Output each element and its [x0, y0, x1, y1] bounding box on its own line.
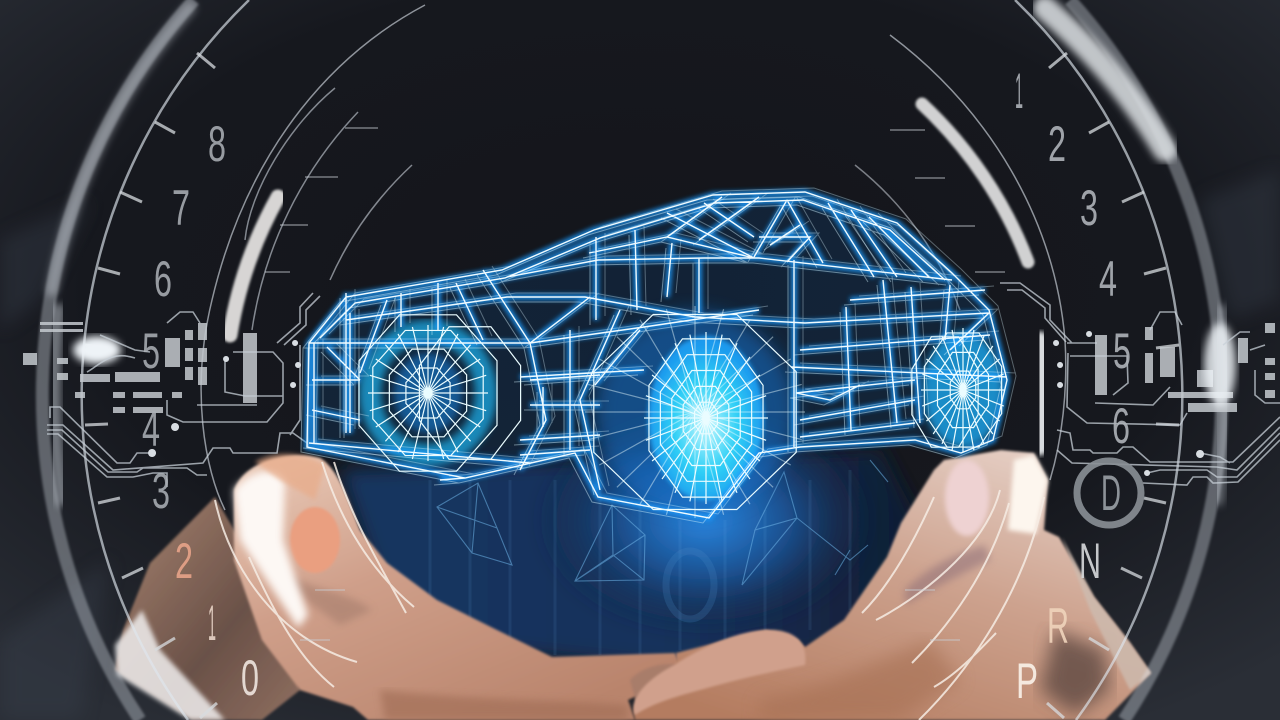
- secondary wire mesh layers: [301, 197, 1001, 523]
- right circuit blocks: [1095, 323, 1275, 412]
- left gauge numerals: 0: [241, 650, 259, 706]
- left hand: [115, 454, 684, 720]
- wheel glows: [370, 312, 1003, 512]
- right gauge numerals and gear letters: 2: [1048, 116, 1066, 172]
- low-poly network under car: [437, 460, 888, 619]
- left gauge numerals: 2: [175, 533, 193, 589]
- left thumbnail: [290, 507, 340, 573]
- left gauge numerals: 1: [208, 595, 216, 651]
- right gauge numerals and gear letters: D: [1101, 465, 1121, 521]
- left gauge numerals: [142, 116, 259, 706]
- right gauge numerals and gear letters: 4: [1099, 251, 1117, 307]
- right hand: [633, 450, 1151, 720]
- left gauge numerals: 8: [208, 116, 226, 172]
- right gauge numerals and gear letters: N: [1079, 533, 1101, 589]
- white wire mesh: [307, 192, 1007, 518]
- right circuit traces: [1000, 283, 1280, 485]
- back of left hand: [115, 497, 300, 720]
- white fingertip glare: [234, 471, 308, 628]
- thick gauge highlights: [52, 8, 1226, 500]
- right gauge numerals and gear letters: 3: [1080, 180, 1098, 236]
- car body glow: [307, 192, 1007, 518]
- left thumb and palm: [234, 455, 683, 720]
- right circuit dots: [1053, 331, 1204, 476]
- left circuit board: [23, 293, 320, 487]
- left circuit glow: [73, 336, 121, 364]
- wheel meshes: [359, 306, 1005, 518]
- blue glow below car: [340, 405, 930, 670]
- left gauge numerals: 7: [172, 180, 190, 236]
- background haze streaks: [0, 170, 1280, 720]
- right gauge numerals and gear letters: 1: [1015, 63, 1023, 119]
- glow behind wires: [307, 192, 1007, 518]
- fold of left fingers: [630, 664, 684, 702]
- arcs over hands: [215, 462, 1044, 720]
- left gauge numerals: 3: [152, 463, 170, 519]
- right gauge numerals and gear letters: P: [1016, 653, 1038, 709]
- right thumbnail: [945, 460, 989, 536]
- left gauge numerals: 4: [142, 401, 160, 457]
- left gauge numerals: 5: [142, 323, 160, 379]
- left gauge numerals: 6: [154, 251, 172, 307]
- wireframe car: [301, 188, 1016, 523]
- inner short ticks: [265, 128, 1005, 640]
- white thumb glare: [1008, 455, 1048, 534]
- left circuit traces: [47, 293, 320, 487]
- left circuit blocks: [23, 322, 257, 413]
- white lower left glare: [115, 610, 225, 720]
- right gauge numerals and gear letters: 5: [1113, 323, 1131, 379]
- right index finger: [633, 630, 805, 715]
- right circuit glow: [1204, 323, 1236, 407]
- right palm and thumb: [634, 450, 1151, 720]
- gauge ticks: [85, 53, 1179, 718]
- right gauge numerals and gear letters: R: [1047, 598, 1069, 654]
- dark shadow near gear letters: [1040, 630, 1110, 715]
- right gauge numerals and gear letters: [1015, 63, 1141, 709]
- left circuit dots: [148, 340, 301, 457]
- right circuit board: [1000, 283, 1280, 485]
- right gauge numerals and gear letters: 6: [1112, 398, 1130, 454]
